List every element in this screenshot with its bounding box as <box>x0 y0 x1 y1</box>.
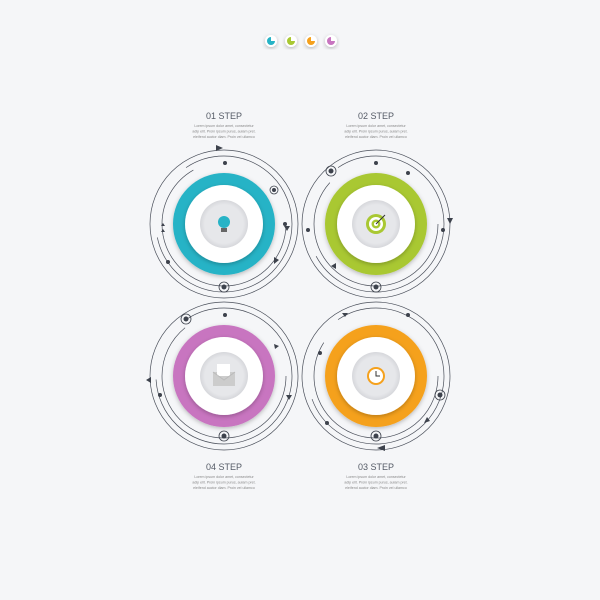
text: 01 step: eleifend auctor diam. Proin vel ullamco <box>193 135 255 139</box>
orbit lines <box>150 150 450 450</box>
text: 02 step <box>344 111 408 139</box>
orbit markers <box>146 145 453 451</box>
text: 03 step: 03 STEP <box>358 462 394 472</box>
step 2 circle <box>325 173 427 275</box>
text: 04 step: adip elit. Proin ipsum purus, auiam pret. <box>192 480 256 484</box>
text: 01 step: adip elit. Proin ipsum purus, auiam pret. <box>192 130 256 134</box>
text: 04 step: eleifend auctor diam. Proin vel ullamco <box>193 486 255 490</box>
icon: alarm clock <box>367 367 385 385</box>
step 3 circle <box>325 325 427 427</box>
text: 03 step: Lorem ipsum dolor amet, consectetur <box>346 475 406 479</box>
text: 02 step: adip elit. Proin ipsum purus, auiam pret. <box>344 130 408 134</box>
text: 04 step: Lorem ipsum dolor amet, consectetur <box>194 475 254 479</box>
text: 03 step <box>344 462 408 490</box>
icon: envelope <box>213 364 235 386</box>
text: 03 step: eleifend auctor diam. Proin vel ullamco <box>345 486 407 490</box>
text: 01 step: Lorem ipsum dolor amet, consectetur <box>194 124 254 128</box>
legend dots <box>265 35 337 47</box>
text: 01 step: 01 STEP <box>206 111 242 121</box>
text: 04 step <box>192 462 256 490</box>
text: 02 step: 02 STEP <box>358 111 394 121</box>
icon: target <box>366 214 386 234</box>
step 1 circle <box>173 173 275 275</box>
icon: bulb <box>218 216 230 232</box>
step 4 circle <box>173 325 275 427</box>
text: 03 step: adip elit. Proin ipsum purus, auiam pret. <box>344 480 408 484</box>
text: 02 step: Lorem ipsum dolor amet, consectetur <box>346 124 406 128</box>
text: 02 step: eleifend auctor diam. Proin vel ullamco <box>345 135 407 139</box>
text: 01 step <box>192 111 256 139</box>
text: 04 step: 04 STEP <box>206 462 242 472</box>
